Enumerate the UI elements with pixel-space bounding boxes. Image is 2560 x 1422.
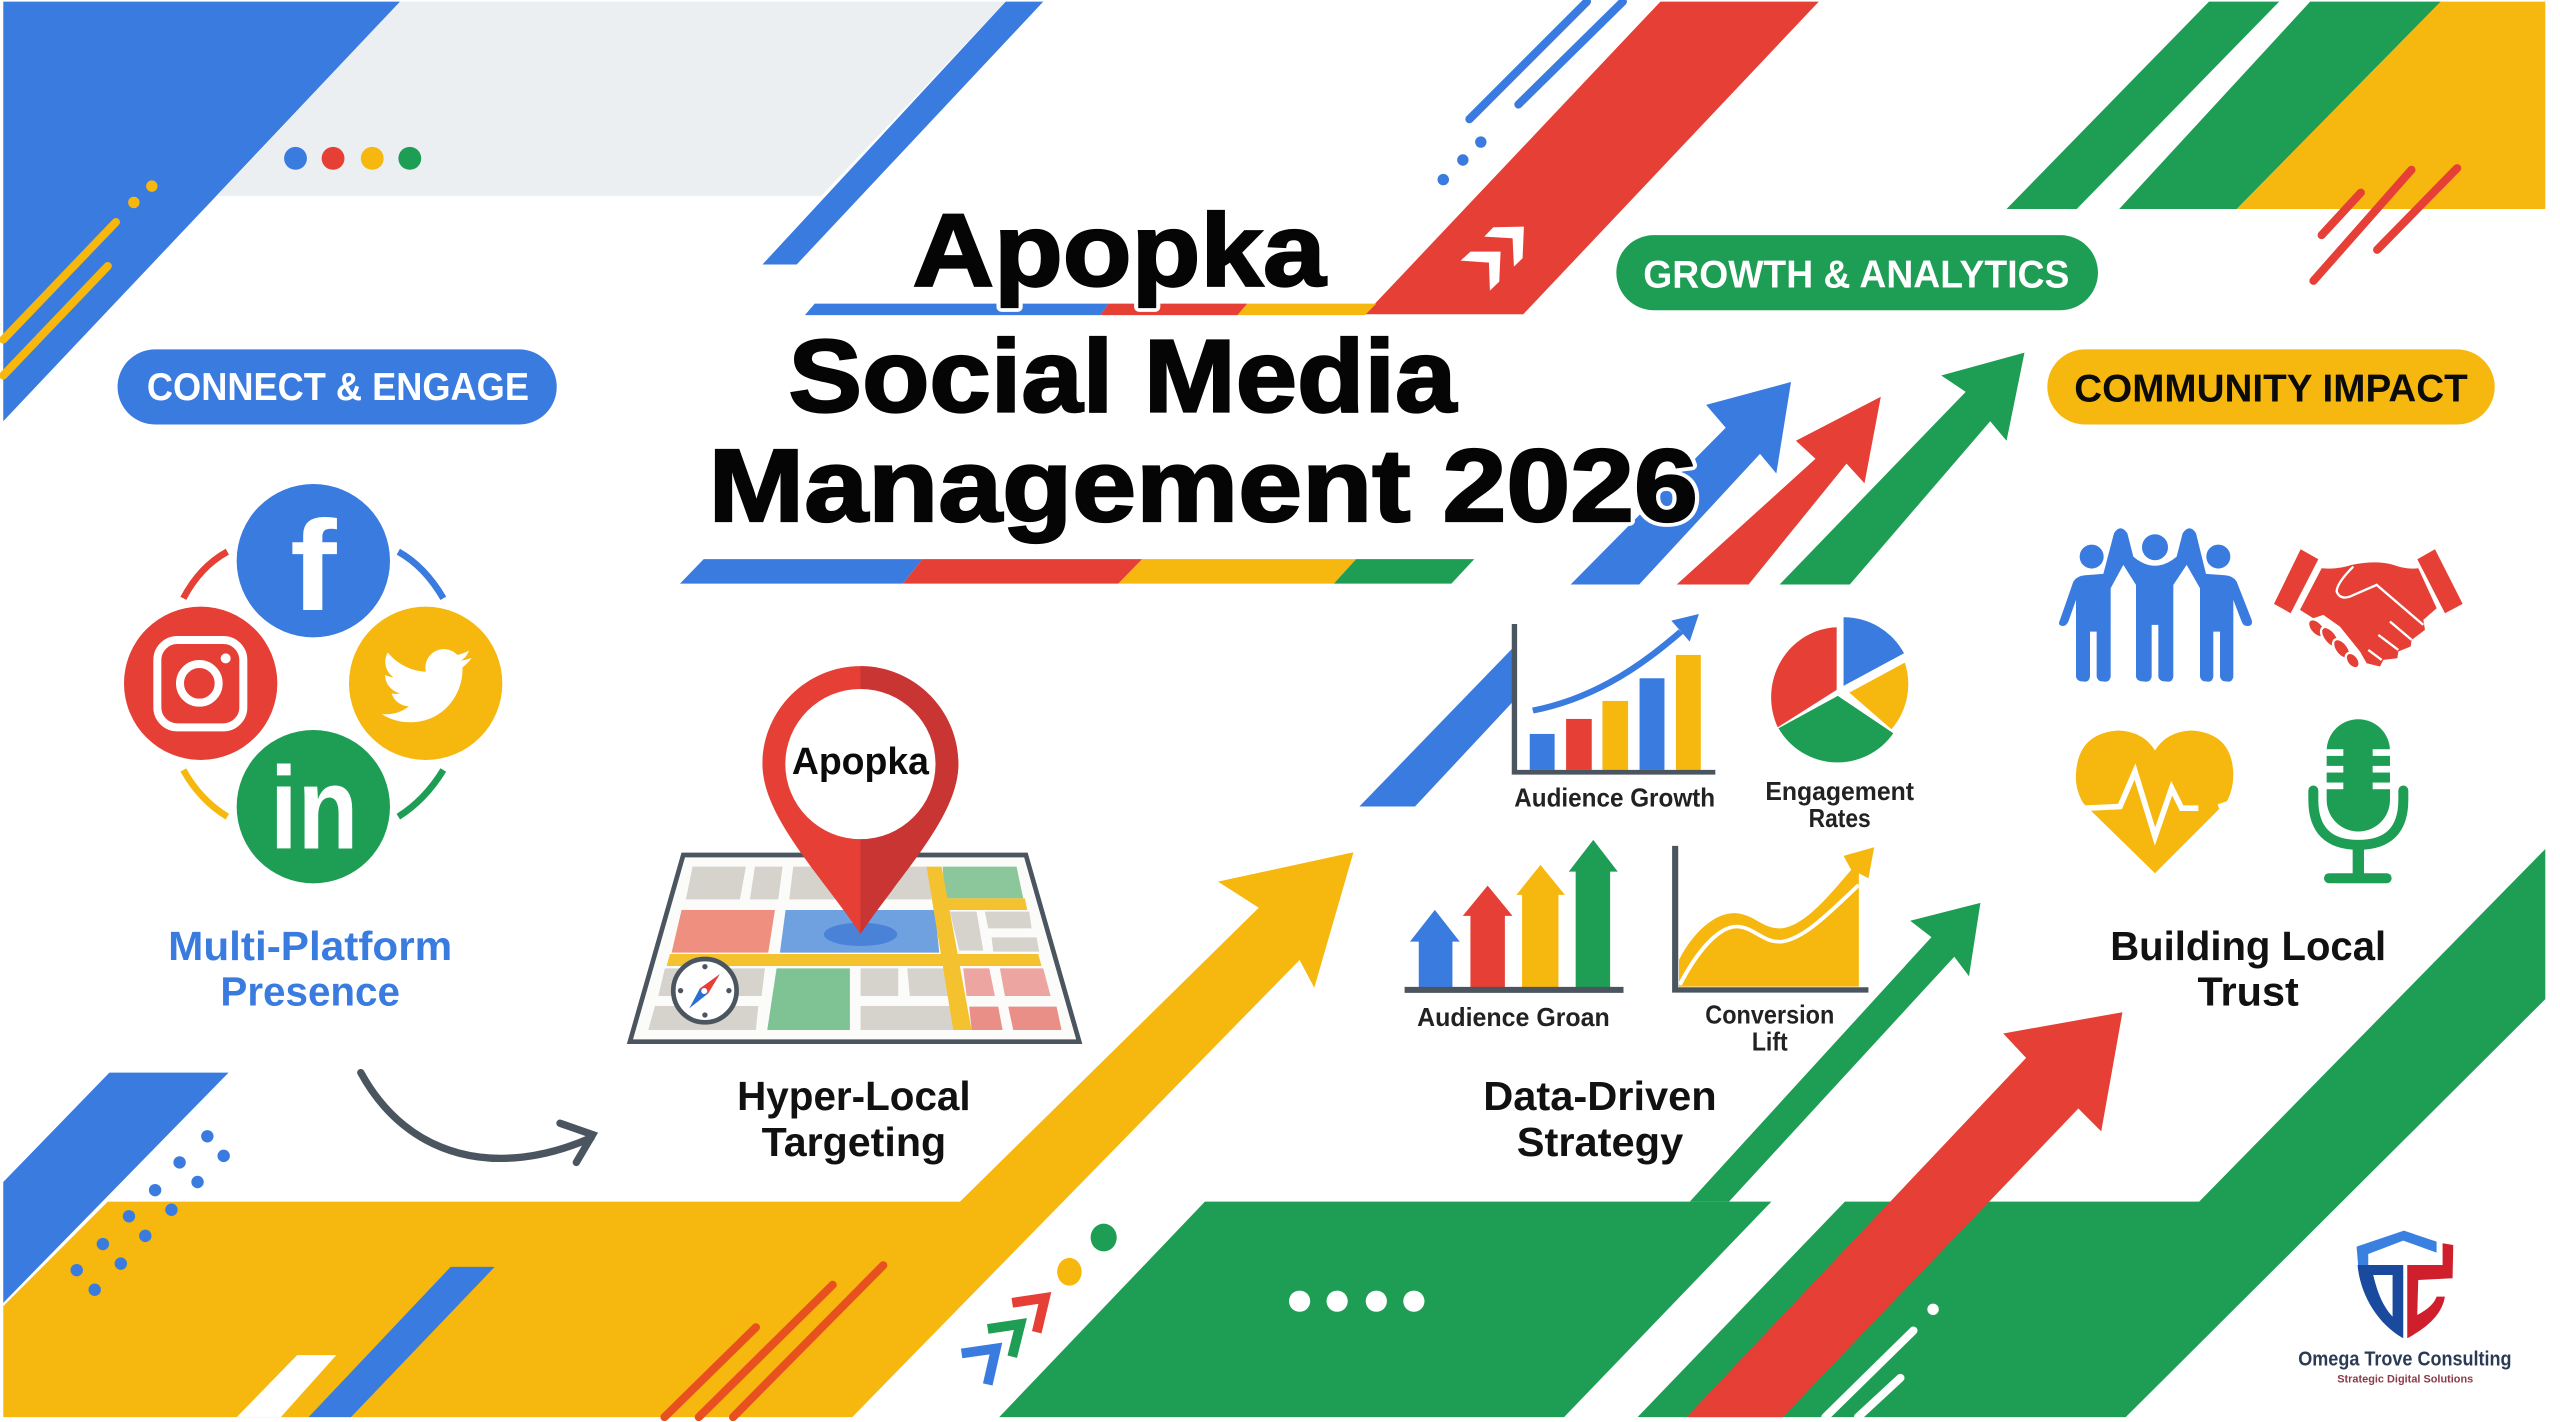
title: Apopka (913, 193, 1327, 308)
icon: linkedin (237, 730, 390, 883)
title: Social Media (789, 318, 1457, 433)
icon: heart with pulse (2076, 731, 2233, 873)
social icon cluster (124, 484, 502, 883)
label: hyper-local targeting (737, 1073, 971, 1165)
bottom green shapes (999, 849, 2545, 1417)
map (630, 855, 1079, 1042)
title: Management 2026 (709, 428, 1698, 543)
icon: twitter (349, 607, 502, 760)
top-centre red band with chevrons (1365, 2, 1819, 314)
bar chart: audience growth (1514, 614, 1715, 813)
bottom yellow band with big arrow (3, 852, 1353, 1417)
four colour dots (284, 147, 421, 170)
icon: linkedin: in (270, 742, 358, 873)
label: building local trust: Building Local (2110, 923, 2386, 969)
community icons (2059, 528, 2463, 883)
top-left background shapes (3, 2, 1043, 421)
area chart: conversion lift: Lift (1752, 1027, 1788, 1057)
pill: growth and analytics: GROWTH & ANALYTICS (1643, 253, 2069, 296)
label: building local trust (2110, 923, 2386, 1015)
orange diagonal lines (664, 1265, 883, 1417)
data charts (1359, 614, 1914, 1057)
map pin: Apopka (792, 740, 930, 782)
top-right background shapes (2007, 2, 2545, 281)
icon: compass (673, 959, 737, 1022)
bar chart: audience growth: Audience Growth (1514, 783, 1715, 813)
pie chart: engagement rates: Rates (1809, 803, 1871, 833)
label: data-driven strategy: Data-Driven (1483, 1073, 1717, 1119)
pill: connect and engage (118, 349, 557, 424)
icon: people (2059, 528, 2252, 682)
title: Apopka (913, 193, 1327, 308)
label: hyper-local targeting: Hyper-Local (737, 1073, 971, 1119)
pill: growth and analytics (1616, 235, 2098, 310)
map pin (762, 666, 958, 934)
icon: handshake (2274, 549, 2463, 671)
small green arrow (1690, 903, 1980, 1202)
growth arrows: blue, red, green (1571, 353, 2024, 584)
pie chart: engagement rates: Engagement (1765, 776, 1914, 806)
title: Social Media (789, 318, 1457, 433)
title (709, 193, 1698, 543)
pie chart: engagement rates (1765, 617, 1914, 833)
icon: instagram (124, 607, 277, 760)
mid blue stripe (1359, 648, 1513, 807)
title: Management 2026 (709, 428, 1698, 543)
curved arrow (361, 1073, 593, 1162)
arrow bars: audience groan (1405, 840, 1624, 1032)
pill: community impact: COMMUNITY IMPACT (2074, 368, 2468, 411)
pill: connect and engage: CONNECT & ENGAGE (147, 366, 529, 409)
logo: omega trove consulting: Omega Trove Consulting (2298, 1348, 2512, 1371)
label: data-driven strategy: Strategy (1517, 1119, 1684, 1165)
bottom-left blue shape and dots (3, 1073, 495, 1417)
arrow bars: audience groan: Audience Groan (1417, 1002, 1610, 1032)
label: hyper-local targeting: Targeting (762, 1119, 946, 1165)
area chart: conversion lift: Conversion (1705, 999, 1834, 1029)
icon: facebook (237, 484, 390, 638)
big red arrow (1687, 1012, 2122, 1417)
logo: omega trove consulting: Strategic Digital Solutions (2337, 1374, 2473, 1386)
label: building local trust: Trust (2198, 969, 2299, 1015)
label: multi-platform presence: Multi-Platform (168, 923, 452, 969)
title accent bars (680, 304, 1474, 584)
label: data-driven strategy (1483, 1073, 1717, 1165)
icon: facebook: f (290, 495, 337, 638)
icon: microphone (2313, 719, 2403, 883)
label: multi-platform presence: Presence (220, 969, 400, 1015)
pill: community impact (2047, 349, 2495, 424)
label: multi-platform presence (168, 923, 452, 1015)
logo: omega trove consulting (2298, 1231, 2512, 1386)
small chevrons and dots (962, 1224, 1117, 1384)
area chart: conversion lift (1675, 846, 1874, 1057)
